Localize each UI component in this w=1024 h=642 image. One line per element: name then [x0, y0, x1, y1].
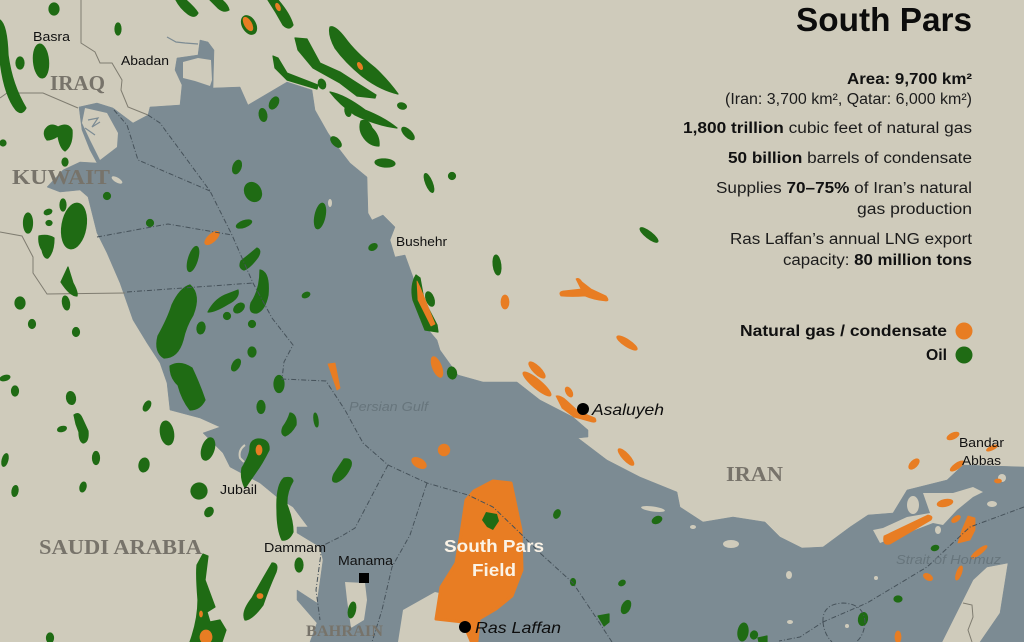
gas and condensate fields: [200, 3, 1002, 642]
city labels: Basra: [33, 29, 71, 44]
facts text block: (Iran: 3,700 km², Qatar: 6,000 km²): [725, 91, 972, 108]
oil fields: Iraq and Kuwait: [0, 3, 121, 311]
sea labels: Strait of Hormuz: [896, 552, 1002, 567]
oil fields: northern gulf: [146, 95, 328, 358]
marker: Manama: [359, 573, 369, 583]
country labels: BAHRAIN: [306, 623, 383, 640]
oil fields: Saudi Arabia: [0, 320, 357, 642]
city labels: Manama: [338, 553, 394, 568]
water channels: delta and wetlands: [85, 37, 198, 135]
facts text block: [683, 71, 973, 269]
sea labels: [349, 399, 1002, 567]
South Pars Field label: South Pars: [444, 536, 544, 556]
city labels: Bandar: [959, 435, 1005, 450]
maritime boundaries: [97, 110, 1024, 642]
title: South Pars: [796, 1, 972, 38]
country labels: SAUDI ARABIA: [39, 535, 203, 559]
South Pars Field label: Field: [472, 560, 516, 580]
oil fields: Iranian interior stripes: [176, 0, 660, 380]
legend: [740, 322, 972, 364]
South Pars Field label: [444, 536, 544, 580]
country labels: IRAQ: [50, 71, 105, 95]
country labels: IRAN: [726, 462, 783, 486]
sea labels: Persian Gulf: [349, 399, 430, 414]
oil field inside South Pars: [482, 512, 499, 530]
city labels: [33, 29, 1005, 568]
country labels: [12, 71, 783, 640]
facts text block: gas production: [857, 201, 972, 218]
facts text block: capacity: 80 million tons: [783, 252, 972, 269]
facts text block: 50 billion barrels of condensate: [728, 150, 972, 167]
South Pars field shape: [436, 481, 522, 641]
legend: Oil: [926, 347, 947, 364]
facts text block: 1,800 trillion cubic feet of natural gas: [683, 120, 972, 137]
city labels: Abbas: [962, 453, 1002, 468]
facts text block: Ras Laffan’s annual LNG export: [730, 231, 973, 248]
facts text block: Area: 9,700 km²: [847, 71, 972, 88]
oil fields: central and eastern gulf: [333, 459, 939, 642]
city labels: Bushehr: [396, 234, 448, 249]
legend: Natural gas / condensate: [740, 323, 947, 340]
marker: Ras Laffan: Ras Laffan: [475, 620, 561, 637]
country labels: KUWAIT: [12, 165, 110, 189]
land: Qatar peninsula: [398, 592, 478, 642]
city labels: Dammam: [264, 540, 326, 555]
city labels: Abadan: [121, 53, 169, 68]
city labels: Jubail: [220, 482, 257, 497]
facts text block: Supplies 70–75% of Iran’s natural: [716, 180, 972, 197]
marker: Asaluyeh: Asaluyeh: [591, 402, 664, 419]
